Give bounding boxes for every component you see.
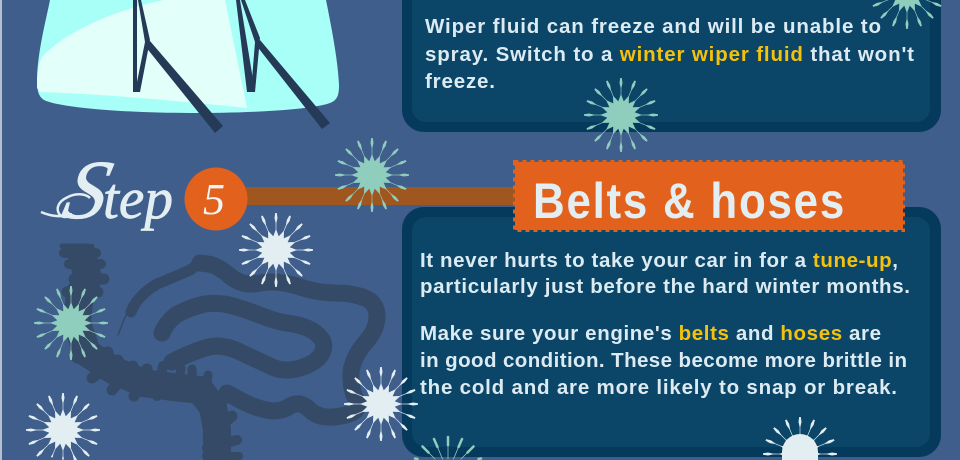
heading text: Belts & hoses <box>533 173 846 229</box>
illustration: corrugated hose <box>62 246 239 460</box>
belts and hoses text: Make sure your engine's belts and hoses are <box>420 322 881 345</box>
step number circle: 5 <box>203 175 225 224</box>
belts and hoses text: It never hurts to take your car in for a tune-up, <box>420 249 898 272</box>
wiper fluid text <box>425 15 914 93</box>
right wiper <box>236 0 330 129</box>
step script capital: S <box>55 144 120 237</box>
icon: windshield with wipers <box>37 0 339 133</box>
icon: snowflake teal on bar <box>335 138 409 212</box>
belts and hoses text: particularly just before the hard winter months. <box>420 275 910 298</box>
wiper fluid text: Wiper fluid can freeze and will be unable to <box>425 15 881 38</box>
wiper fluid text: spray. Switch to a winter wiper fluid that won't <box>425 43 914 66</box>
icon: snowflake white bottom left <box>26 393 100 460</box>
icon: snowflake teal on hose <box>34 286 108 360</box>
icon: snowflake white near hose <box>239 213 313 287</box>
icon: snowflake white bottom right <box>763 417 837 460</box>
left wiper <box>133 0 223 133</box>
heading badge: belts and hoses <box>514 162 904 230</box>
step swash <box>41 194 90 217</box>
panel: wiper fluid <box>402 0 941 132</box>
step number circle <box>184 168 248 230</box>
icon: snowflake teal centre <box>584 78 658 152</box>
wiper fluid text: freeze. <box>425 70 495 93</box>
belts and hoses text: in good condition. These become more brittle in <box>420 349 907 372</box>
windshield highlight <box>37 0 247 108</box>
icon: snowflake teal bottom <box>415 437 481 459</box>
windshield glass <box>37 0 339 113</box>
step label <box>41 144 173 237</box>
step script letters: tep <box>103 166 173 231</box>
belts and hoses text: the cold and are more likely to snap or break. <box>420 376 897 399</box>
icon: snowflake teal top right <box>870 0 944 29</box>
connector bar <box>240 187 520 205</box>
panel: belts and hoses <box>402 207 941 457</box>
belts and hoses text <box>420 249 910 399</box>
icon: snowflake white on belt <box>344 367 418 441</box>
illustration: belts <box>118 263 377 417</box>
